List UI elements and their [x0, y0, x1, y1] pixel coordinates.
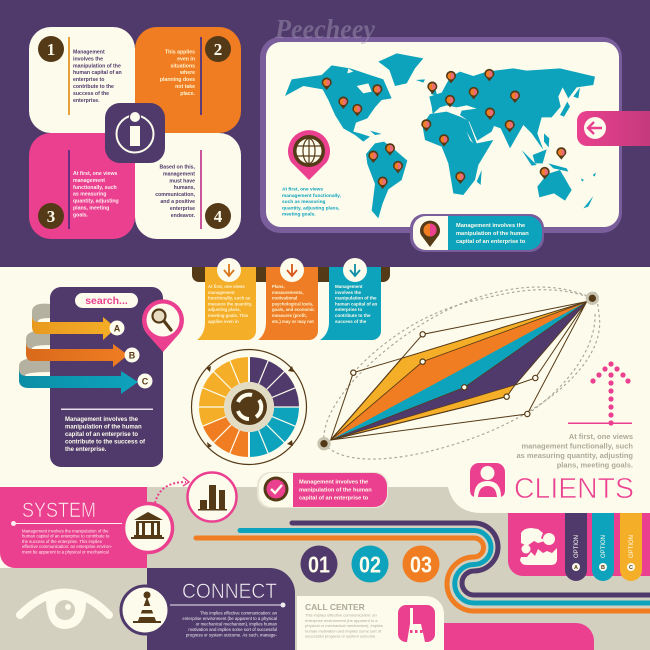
- icon: gears puzzle: [520, 528, 557, 565]
- callout: check: [257, 472, 388, 508]
- step 4 card: and a positive: [160, 199, 195, 205]
- panel: connect: [121, 568, 295, 650]
- system description: the success of the enterprise. This implies: [22, 539, 102, 544]
- icon: bar chart: [188, 472, 236, 522]
- ribbon card teal: involves the: [335, 290, 362, 295]
- search description: contribute to the success of: [65, 440, 146, 446]
- ribbon card orange: measures (profit,: [272, 313, 307, 318]
- icon: eye: [20, 592, 109, 629]
- step 4 card: enterprise: [170, 206, 195, 212]
- call center heading: CALL CENTER: [305, 602, 365, 612]
- step 4 card: communication,: [155, 192, 196, 198]
- network hub left: [317, 437, 331, 450]
- dotted arrow to chart: [155, 477, 189, 503]
- step 3 card: At first, one views: [73, 171, 118, 177]
- map caption: meeting goals.: [282, 212, 316, 218]
- ribbon card yellow: adjusting plans,: [208, 307, 241, 312]
- step 4 card: management: [163, 171, 195, 177]
- world map: [285, 53, 596, 218]
- map pins: [322, 69, 566, 189]
- panel: options: [508, 513, 650, 581]
- ribbon card yellow: measure the quantity,: [208, 301, 252, 306]
- arrow A: [32, 315, 124, 340]
- number badge 01: 01: [308, 552, 330, 578]
- step 2 card: not take: [175, 84, 195, 90]
- icon: info: [105, 103, 165, 163]
- step 2 card: even in: [177, 56, 195, 62]
- step 1 card: 1: [47, 40, 55, 59]
- panel: system: [0, 487, 172, 568]
- search box: [75, 293, 138, 308]
- connect description: motivation and implies some sort of successful: [188, 627, 277, 632]
- step 4 card: 4: [214, 207, 223, 226]
- connect title: CONNECT: [182, 580, 277, 603]
- step 2 card: situations: [170, 63, 195, 69]
- option tab B: OPTION: [601, 535, 607, 558]
- step 3 card: quantity, adjusting: [73, 199, 119, 205]
- call center text: This implies effective communication: an: [305, 612, 377, 618]
- map caption: At first, one views: [282, 186, 323, 192]
- growth caption: as measuring quantity, adjusting: [516, 451, 633, 460]
- panel: four numbered steps: [29, 27, 241, 239]
- connect description: enterprise environment (be apparent to a physical: [182, 616, 277, 621]
- step 4 card: humans,: [174, 185, 196, 191]
- ribbon card yellow: meeting goals. This: [208, 313, 249, 318]
- search description: the enterprise.: [65, 447, 107, 453]
- step 3 card: 3: [47, 207, 55, 226]
- ribbon card orange: etc.) may or may not: [272, 319, 314, 324]
- growth caption: plans, meeting goals.: [557, 460, 633, 470]
- arrow C: C: [142, 376, 149, 386]
- call center text: physical or mechanical mechanism), implies: [305, 623, 383, 628]
- search description: capital of an enterprise to: [65, 432, 138, 438]
- callout: check: capital of an enterprise to: [299, 496, 369, 502]
- step 4 card: endeavor.: [171, 213, 196, 219]
- step 2 card: where: [179, 70, 195, 76]
- clients title: CLIENTS: [514, 473, 634, 505]
- chart: segmented wheel: [192, 350, 306, 464]
- number badge 02: [352, 546, 388, 582]
- flowing stripes: [196, 523, 650, 611]
- search divider: [61, 408, 153, 410]
- step 1 card: enterprise to: [73, 77, 104, 83]
- step 2 card: [135, 27, 241, 133]
- ribbon card teal: success of the: [335, 319, 367, 324]
- pink lower panel: [444, 623, 594, 650]
- step 1 card: Management: [73, 50, 105, 56]
- ribbon card teal: enterprise to: [335, 307, 363, 312]
- ribbon backing: [192, 267, 390, 282]
- beige lower background: [0, 487, 650, 650]
- network hub right: [586, 292, 599, 305]
- legend pill: [410, 214, 544, 252]
- ribbon card yellow: applies even in: [208, 319, 239, 324]
- growth caption: management functionally, such: [521, 442, 633, 450]
- option tab C: C: [629, 565, 633, 571]
- legend pill: Management involves the: [456, 223, 525, 229]
- ribbon card yellow: [197, 258, 256, 340]
- connect description: progress or system outcome. As such, manage-: [186, 632, 278, 638]
- callout: check: manipulation of the human: [299, 488, 372, 494]
- call center text: human motivation and implies some sort of: [305, 628, 382, 633]
- ribbon cards: [192, 258, 390, 340]
- icon: magnifier pin: [142, 299, 184, 352]
- step 1 card: involves the: [73, 56, 103, 62]
- search box: search...: [85, 295, 128, 307]
- option tab B: B: [601, 565, 605, 571]
- panel: search: [19, 287, 184, 467]
- ribbon card yellow: At first, one views: [208, 284, 245, 289]
- step 1 card: success of the: [73, 91, 109, 97]
- step 3 card: [29, 133, 135, 239]
- step 3 card: as measuring: [73, 192, 106, 198]
- step 4 card: [135, 133, 241, 239]
- icon: globe pin: [288, 130, 330, 180]
- chart: network diamond: [317, 287, 600, 459]
- ribbon card teal: manipulation of the: [335, 296, 377, 301]
- system title: SYSTEM: [22, 499, 96, 522]
- arrow B: [26, 342, 140, 367]
- system rule: [11, 521, 128, 526]
- option tab B: [592, 513, 614, 581]
- system description: ment be apparent to a physical or mechanical: [22, 549, 109, 554]
- top purple band: [0, 0, 650, 267]
- system description: human capital of an enterprise to contribute to: [22, 534, 110, 539]
- option tab C: [620, 513, 642, 581]
- connect description: or mechanical mechanism), implies human: [196, 622, 278, 626]
- icon: recycle arrows: [238, 395, 261, 419]
- map caption: quantity, adjusting plans,: [282, 205, 340, 211]
- search description: manipulation of the human: [65, 424, 142, 430]
- step 4 card: Based on this,: [160, 164, 196, 170]
- callout: check: Management involves the: [299, 480, 368, 486]
- ribbon card teal: contribute to the: [335, 313, 371, 318]
- step 2 card: 2: [214, 40, 222, 59]
- connect rule: [168, 602, 286, 608]
- step 4 card: must have: [169, 178, 195, 184]
- system description: effective communication: an enterprise environ-: [22, 544, 113, 549]
- map caption: management functionally,: [282, 193, 341, 199]
- step 1 card: human capital of an: [73, 70, 122, 76]
- number badge 02: 02: [359, 552, 381, 578]
- arrow C: [19, 369, 152, 394]
- search description: Management involves the: [65, 417, 139, 423]
- step 3 card: functionally, such: [73, 185, 117, 191]
- ribbon card teal: Management: [335, 284, 363, 289]
- system description: Management involves the manipulation of the: [22, 528, 109, 534]
- arrow B: B: [129, 350, 136, 360]
- ribbon card orange: [258, 258, 318, 340]
- step 3 card: goals.: [73, 212, 89, 218]
- icon: temple: [124, 504, 172, 552]
- panel: world map: [260, 37, 650, 252]
- step 2 card: This applies: [165, 50, 195, 56]
- clients heading: [470, 463, 634, 505]
- step 1 card: [29, 27, 135, 133]
- number badge 01: [300, 546, 338, 582]
- icon: client: [470, 463, 505, 497]
- legend pill: manipulation of the human: [456, 231, 529, 237]
- option tab A: A: [574, 565, 578, 571]
- arrow A: A: [114, 324, 121, 334]
- step 1 card: contribute to the: [73, 84, 114, 90]
- legend pill: capital of an enterprise to: [456, 239, 526, 245]
- ribbon card orange: psychological tools,: [272, 301, 313, 306]
- connect description: This implies effective communication: an: [200, 610, 278, 616]
- step 1 card: manipulation of the: [73, 63, 121, 69]
- watermark: Peecheey: [274, 14, 376, 44]
- number badge 03: 03: [410, 552, 432, 578]
- step 2 card: planning does: [160, 77, 195, 83]
- step 3 card: plans, meeting: [73, 206, 109, 212]
- map caption: such as measuring: [282, 199, 326, 205]
- call center text: enterprise environment (be apparent to a: [305, 618, 378, 623]
- ribbon card orange: motivational: [272, 296, 297, 301]
- option tab A: [565, 513, 587, 581]
- option tab A: OPTION: [574, 535, 580, 558]
- ribbon card teal: human capital of an: [335, 301, 378, 306]
- call center text: successful progress or system outcome.: [305, 634, 376, 639]
- growth caption: At first, one views: [569, 432, 633, 441]
- network nodes: [351, 332, 538, 417]
- right tab with arrow: [577, 111, 650, 146]
- ribbon card orange: Plans,: [272, 284, 285, 289]
- option tab C: OPTION: [629, 535, 635, 558]
- icon: dotted up arrow: [568, 361, 632, 426]
- step 2 card: place.: [180, 91, 196, 97]
- ribbon card orange: goals, and economic: [272, 307, 315, 312]
- step 1 card: enterprise.: [73, 98, 100, 104]
- ribbon card yellow: functionally, such as: [208, 296, 251, 301]
- step 3 card: management: [73, 178, 105, 184]
- icon: tower: [121, 586, 169, 634]
- ribbon card orange: measurements,: [272, 290, 304, 295]
- icon: brush: [398, 605, 435, 642]
- panel: call center: [297, 596, 444, 650]
- number badge 03: [402, 546, 440, 582]
- ribbon card yellow: management: [208, 290, 235, 295]
- ribbon card teal: [320, 258, 381, 340]
